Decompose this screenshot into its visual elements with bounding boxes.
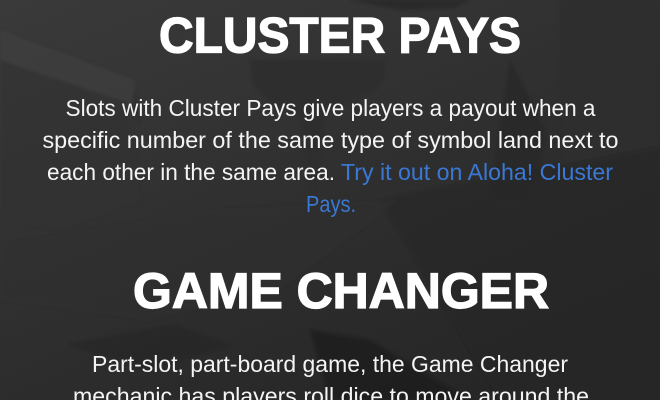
text block: Cluster Pays description: Slots with Cluster Pays give players a payout when a <box>66 95 596 121</box>
title: Game Changer: GAME CHANGER <box>133 263 549 319</box>
text block: Cluster Pays description: Pays. <box>306 191 356 217</box>
text block: Cluster Pays description: Try it out on Aloha! Cluster <box>341 159 613 185</box>
text block: Cluster Pays description: each other in the same area. <box>47 159 335 185</box>
text block: Game Changer description: Part-slot, part-board game, the Game Changer <box>92 351 568 377</box>
title: Cluster Pays: CLUSTER PAYS <box>159 8 521 64</box>
text block: Cluster Pays description: specific number of the same type of symbol land next to <box>42 127 618 153</box>
text block: Cluster Pays description <box>42 95 618 217</box>
text block: Game Changer description <box>73 351 589 400</box>
